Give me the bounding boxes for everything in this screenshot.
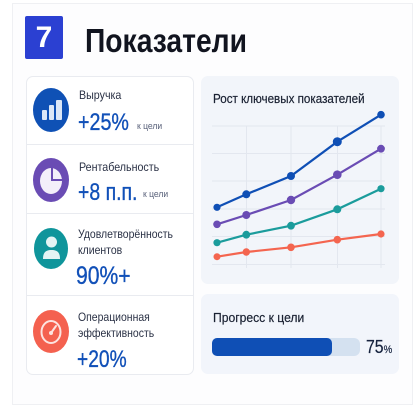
series: revenue (213, 111, 385, 211)
badge: number 7 (25, 16, 63, 59)
metric: operational efficiency (33, 310, 154, 373)
label: operational efficiency (78, 310, 154, 340)
series: customer satisfaction (213, 185, 385, 246)
series: operational efficiency (214, 230, 385, 260)
metric: revenue (26, 76, 194, 145)
panel: metrics (26, 76, 194, 375)
label: operational efficiency: эффективность (78, 326, 154, 340)
panel: goal progress (201, 294, 399, 374)
icon: gauge (33, 310, 69, 353)
value: profitability: +8 п.п. (78, 179, 137, 206)
icon: pie chart (33, 158, 69, 202)
badge: number 7: 7 (36, 21, 52, 54)
value: customer satisfaction: 90%+ (76, 262, 131, 290)
metric: customer satisfaction (26, 214, 194, 296)
icon: bar chart (33, 88, 69, 132)
label: operational efficiency: Операционная (78, 310, 150, 324)
value: revenue: +25% (78, 109, 129, 136)
icon: person (34, 228, 68, 269)
progress track (212, 338, 360, 356)
label: profitability: Рентабельность (79, 160, 159, 174)
note: profitability: к цели (143, 189, 168, 200)
progress value: 75% (366, 337, 392, 357)
title: Показатели (85, 22, 247, 59)
chart heading: Рост ключевых показателей (213, 92, 365, 106)
note: revenue: к цели (137, 121, 162, 132)
series: profitability (213, 145, 385, 228)
line chart (212, 110, 385, 268)
value: operational efficiency: +20% (77, 346, 127, 373)
label: customer satisfaction: Удовлетворённость (78, 227, 173, 241)
progress fill (212, 338, 332, 356)
panel: growth chart (201, 76, 399, 284)
label: customer satisfaction (78, 227, 173, 257)
progress heading: Прогресс к цели (212, 311, 304, 325)
label: customer satisfaction: клиентов (78, 243, 122, 257)
metric: profitability (26, 145, 194, 214)
label: revenue: Выручка (79, 88, 121, 102)
